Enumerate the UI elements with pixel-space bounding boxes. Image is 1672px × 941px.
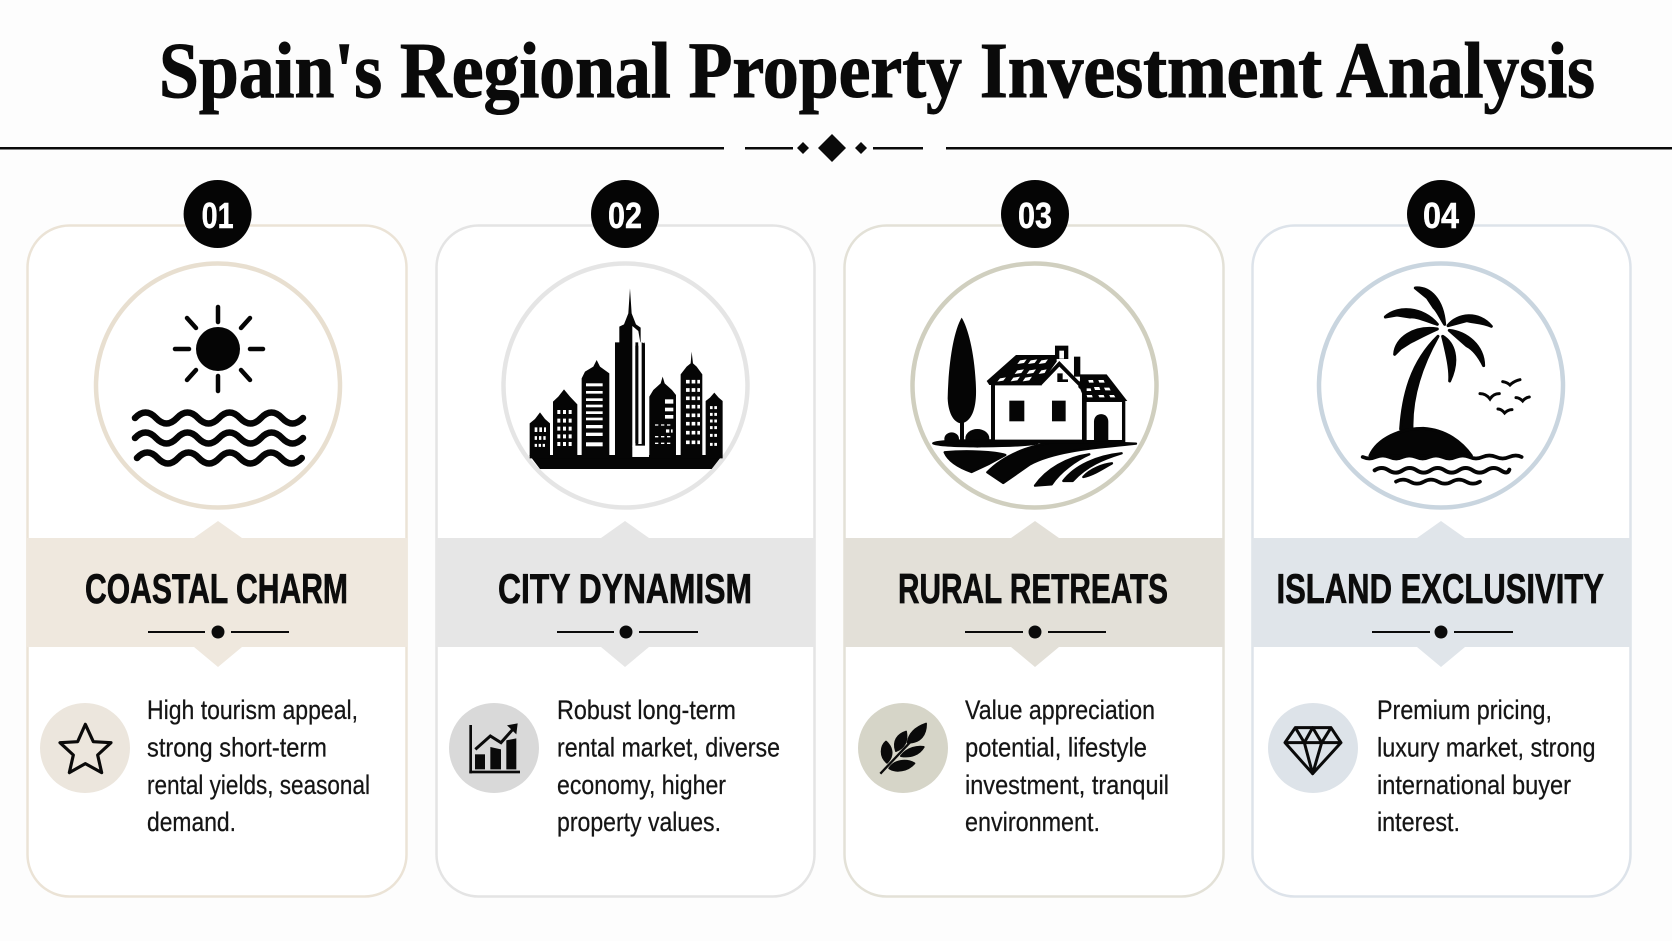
description	[1377, 695, 1596, 837]
icon: sun over waves	[96, 264, 340, 508]
icon: diamond	[1268, 703, 1358, 793]
description: Robust long-term	[557, 695, 736, 725]
description	[147, 695, 370, 837]
description: rental market, diverse	[557, 732, 780, 762]
icon: leaf branch	[858, 703, 948, 793]
icon: star	[40, 703, 130, 793]
heading: RURAL RETREATS	[898, 565, 1168, 612]
panel: coastal charm	[27, 180, 407, 896]
description: interest.	[1377, 807, 1460, 837]
description: environment.	[965, 807, 1100, 837]
description: investment, tranquil	[965, 770, 1169, 800]
heading band	[27, 521, 407, 667]
icon: palm island	[1319, 264, 1563, 508]
description: economy, higher	[557, 770, 726, 800]
description: potential, lifestyle	[965, 732, 1147, 762]
number badge 03	[1001, 180, 1069, 248]
description: rental yields, seasonal	[147, 770, 370, 800]
heading band	[1252, 521, 1631, 667]
number badge 04	[1407, 180, 1475, 248]
heading divider	[148, 626, 289, 638]
description: Premium pricing,	[1377, 695, 1552, 725]
panel: city dynamism	[436, 180, 815, 896]
heading: CITY DYNAMISM	[498, 565, 752, 612]
number badge 01	[184, 180, 252, 248]
title divider with diamonds	[0, 134, 1672, 162]
heading divider	[1372, 626, 1513, 638]
description	[965, 695, 1169, 837]
description: High tourism appeal,	[147, 695, 358, 725]
number badge 03: 03	[1018, 195, 1052, 236]
number badge 02	[591, 180, 659, 248]
heading band	[844, 521, 1224, 667]
icon: city skyline	[504, 264, 748, 508]
number badge 01: 01	[202, 195, 234, 236]
description: international buyer	[1377, 770, 1571, 800]
heading band	[436, 521, 815, 667]
heading divider	[557, 626, 698, 638]
icon: growth chart	[449, 703, 539, 793]
heading divider	[965, 626, 1106, 638]
description: strong short-term	[147, 732, 327, 762]
description: luxury market, strong	[1377, 732, 1596, 762]
panel: island exclusivity	[1252, 180, 1631, 896]
number badge 04: 04	[1423, 195, 1459, 236]
panel: rural retreats	[844, 180, 1224, 896]
description: Value appreciation	[965, 695, 1155, 725]
heading: COASTAL CHARM	[85, 565, 348, 612]
description	[557, 695, 780, 837]
number badge 02: 02	[608, 195, 642, 236]
description: property values.	[557, 807, 721, 837]
description: demand.	[147, 807, 236, 837]
icon: farmhouse	[912, 264, 1156, 508]
